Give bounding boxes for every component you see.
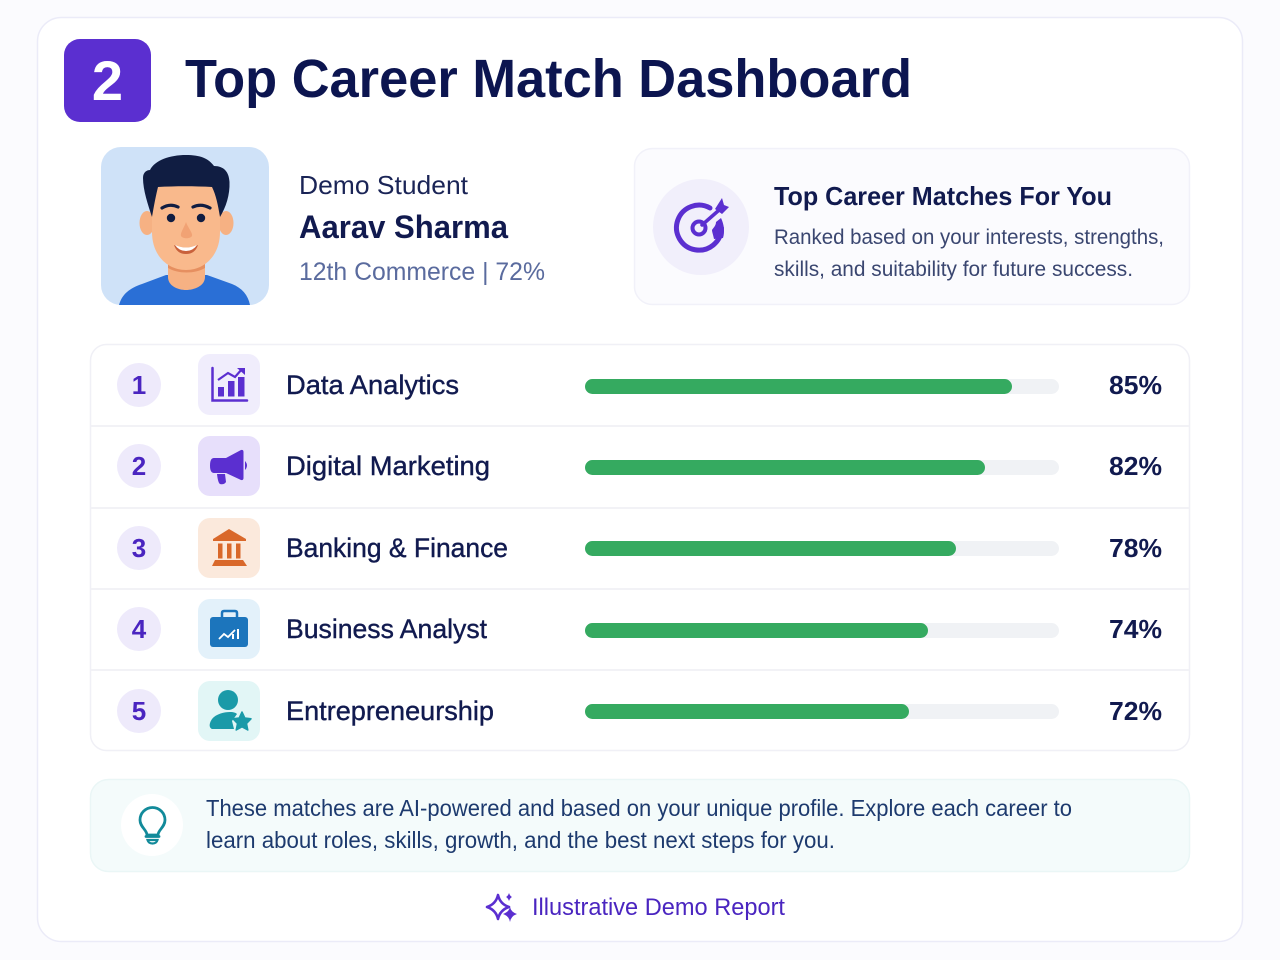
brows: [162, 205, 210, 208]
panel: top career matches intro: Top Career Matches For You: [774, 181, 1112, 211]
neck: [168, 252, 205, 290]
student details: Demo Student: [299, 170, 469, 200]
panel: top career matches intro: Ranked based on your interests, strengths,: [774, 226, 1164, 249]
icon: megaphone: [198, 436, 260, 496]
nose: [181, 222, 192, 238]
title: Top Career Match Dashboard: [185, 49, 912, 109]
student details: 12th Commerce | 72%: [299, 258, 545, 286]
icon: bar chart: [198, 354, 260, 415]
avatar: [101, 147, 269, 305]
callout: AI note: learn about roles, skills, growth, and the best next steps for you.: [206, 827, 835, 853]
row 4: business analyst: [117, 599, 1162, 659]
icon: target: [653, 179, 749, 275]
student details: [299, 170, 545, 286]
row 5: entrepreneurship: 5: [132, 696, 146, 726]
row 2: digital marketing: Digital Marketing: [286, 451, 490, 481]
student details: Aarav Sharma: [299, 209, 508, 245]
callout: AI note: [90, 780, 1190, 872]
icon: bank: [198, 518, 260, 578]
icon: lightbulb: [121, 794, 183, 856]
row 3: banking and finance: 78%: [1109, 533, 1162, 563]
face: [152, 180, 220, 270]
row 1: data analytics: Data Analytics: [286, 370, 459, 400]
eyes: [167, 214, 175, 222]
row 2: digital marketing: 82%: [1109, 451, 1162, 481]
icon: briefcase: [198, 599, 260, 659]
panel: top career matches intro: [634, 148, 1190, 304]
row 4: business analyst: 74%: [1109, 614, 1162, 644]
icon: sparkles: [487, 893, 517, 922]
row 3: banking and finance: [117, 518, 1162, 578]
shirt: [119, 275, 250, 305]
panel: top career matches intro: skills, and suitability for future success.: [774, 258, 1133, 281]
row 1: data analytics: [117, 354, 1162, 415]
row 2: digital marketing: [117, 436, 1162, 496]
row 5: entrepreneurship: Entrepreneurship: [286, 696, 494, 726]
mouth: [174, 245, 198, 254]
row 3: banking and finance: Banking & Finance: [286, 533, 508, 563]
row 4: business analyst: 4: [132, 614, 147, 644]
footer: illustrative demo report: Illustrative Demo Report: [532, 894, 785, 921]
row 3: banking and finance: 3: [132, 533, 146, 563]
row 5: entrepreneurship: [117, 681, 1162, 741]
callout: AI note: These matches are AI-powered and based on your unique profile. Explore each career to: [206, 795, 1072, 821]
row 1: data analytics: 85%: [1109, 370, 1162, 400]
section number badge: 2: [92, 49, 123, 112]
row 1: data analytics: 1: [132, 370, 146, 400]
icon: person with star: [198, 681, 260, 741]
row 2: digital marketing: 2: [132, 451, 146, 481]
row 5: entrepreneurship: 72%: [1109, 696, 1162, 726]
panel: ranked career list: [90, 344, 1190, 750]
ears: [140, 211, 154, 235]
hair: [143, 155, 230, 217]
section number badge: [64, 39, 151, 122]
row 4: business analyst: Business Analyst: [286, 614, 487, 644]
